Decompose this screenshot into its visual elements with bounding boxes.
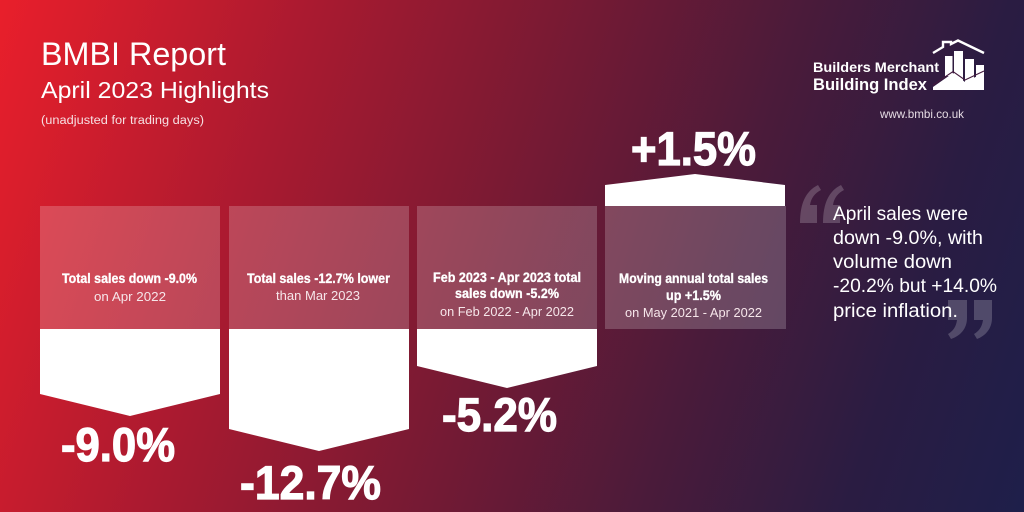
arrow: down 9.0% bbox=[40, 329, 220, 416]
panel box bbox=[417, 206, 597, 329]
value: +1.5% bbox=[631, 122, 756, 175]
panel text bbox=[433, 270, 581, 319]
logo: Builders Merchant Building Index: Builders Merchant bbox=[813, 59, 939, 75]
panel text: Moving annual total sales bbox=[619, 271, 768, 286]
quote text: down -9.0%, with bbox=[833, 227, 983, 249]
panel: total sales vs Mar 2023 bbox=[229, 206, 409, 509]
value: -9.0% bbox=[61, 418, 175, 471]
arrow: down 12.7% bbox=[229, 329, 409, 451]
panel box bbox=[229, 206, 409, 329]
value: -12.7% bbox=[240, 456, 381, 509]
callout: quote bbox=[800, 185, 997, 339]
title: BMBI Report bbox=[41, 36, 226, 72]
value: -5.2% bbox=[442, 388, 557, 441]
title: April 2023 Highlights bbox=[41, 77, 269, 103]
icon: closing quote mark bbox=[948, 300, 992, 339]
panel box bbox=[605, 206, 786, 329]
panel text: sales down -5.2% bbox=[455, 286, 559, 301]
panel text bbox=[62, 271, 197, 304]
panel text bbox=[247, 271, 391, 303]
panel: moving annual total sales bbox=[605, 122, 786, 329]
arrow: up 1.5% bbox=[605, 174, 785, 206]
panel text: on May 2021 - Apr 2022 bbox=[625, 305, 762, 320]
quote text: price inflation. bbox=[833, 300, 958, 322]
subtitle note: (unadjusted for trading days) bbox=[41, 115, 204, 127]
icon: opening quote mark bbox=[800, 185, 844, 223]
quote text: -20.2% but +14.0% bbox=[833, 275, 997, 297]
panel: three-month total sales bbox=[417, 206, 597, 441]
panel text: on Apr 2022 bbox=[94, 289, 166, 304]
quote text: volume down bbox=[833, 251, 952, 273]
panel text: on Feb 2022 - Apr 2022 bbox=[440, 304, 574, 319]
panel box bbox=[40, 206, 220, 329]
quote text bbox=[833, 203, 997, 322]
arrow: down 5.2% bbox=[417, 329, 597, 388]
logo: Builders Merchant Building Index: Building Index bbox=[813, 76, 928, 94]
panel text: Feb 2023 - Apr 2023 total bbox=[433, 270, 581, 285]
panel text: than Mar 2023 bbox=[276, 288, 360, 303]
panel text bbox=[619, 271, 768, 320]
title bbox=[41, 36, 269, 103]
quote text: April sales were bbox=[833, 203, 968, 225]
logo: Builders Merchant Building Index bbox=[813, 40, 984, 94]
panel text: up +1.5% bbox=[666, 288, 721, 303]
panel text: Total sales down -9.0% bbox=[62, 271, 197, 286]
icon: house with bars bbox=[933, 40, 984, 90]
panel: total sales vs Apr 2022 bbox=[40, 206, 220, 471]
panel text: Total sales -12.7% lower bbox=[247, 271, 391, 286]
website: www.bmbi.co.uk bbox=[879, 107, 965, 121]
